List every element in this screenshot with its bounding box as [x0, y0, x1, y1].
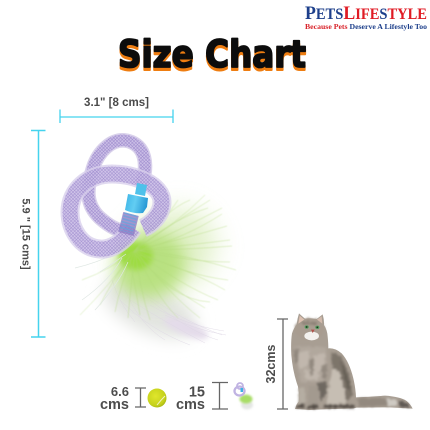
- logo wordmark: PETSLIFESTYLE: [305, 3, 427, 24]
- feather green body: [75, 192, 236, 320]
- back: [331, 352, 353, 402]
- toy: feather plume: [75, 192, 236, 351]
- bracket: [277, 319, 288, 409]
- width bracket: [60, 110, 173, 123]
- height bracket: [31, 130, 46, 337]
- cat height dimension: [264, 319, 288, 409]
- legs: [315, 381, 327, 401]
- cat base silhouette: [291, 313, 413, 410]
- blue connector: [125, 183, 148, 213]
- width label: 3.1" [8 cms]: [84, 97, 149, 109]
- logo: PetsLifestyle: [305, 3, 427, 31]
- bracket: [135, 388, 146, 407]
- chest: [295, 347, 327, 382]
- fur shading: [293, 318, 411, 409]
- toy: mesh knot: [70, 140, 162, 249]
- label 32cms: 32cms: [264, 344, 278, 383]
- toy comparison: [176, 382, 253, 413]
- top loop: [88, 140, 145, 232]
- face: [298, 316, 322, 340]
- label 6.6 cms: cms: [100, 397, 129, 413]
- height dimension: 5.9 in: [20, 130, 46, 337]
- head fur: [294, 318, 324, 340]
- logo tagline: Because Pets Deserve A Lifestyle Too: [305, 22, 427, 31]
- tennis ball comparison: [100, 384, 166, 413]
- width dimension: 3.1 in: [60, 97, 173, 123]
- label 15 cms: cms: [176, 397, 205, 413]
- label 15 cms: 15: [189, 384, 205, 400]
- lower shaft: [126, 214, 131, 234]
- height label: 5.9 " [15 cms]: [20, 198, 32, 270]
- title: Size Chart: Size Chart: [118, 36, 306, 79]
- title: Size Chart: Size Chart: [118, 33, 306, 76]
- photo: sitting cat: [291, 313, 413, 410]
- bracket: [212, 382, 228, 409]
- tail: [357, 397, 396, 406]
- feather white-lilac tail: [95, 265, 226, 351]
- icon: tennis ball: [148, 388, 166, 408]
- large ring: [70, 174, 162, 249]
- icon: mini toy: [234, 383, 253, 410]
- paws: [295, 404, 354, 409]
- label 6.6 cms: 6.6: [111, 384, 129, 399]
